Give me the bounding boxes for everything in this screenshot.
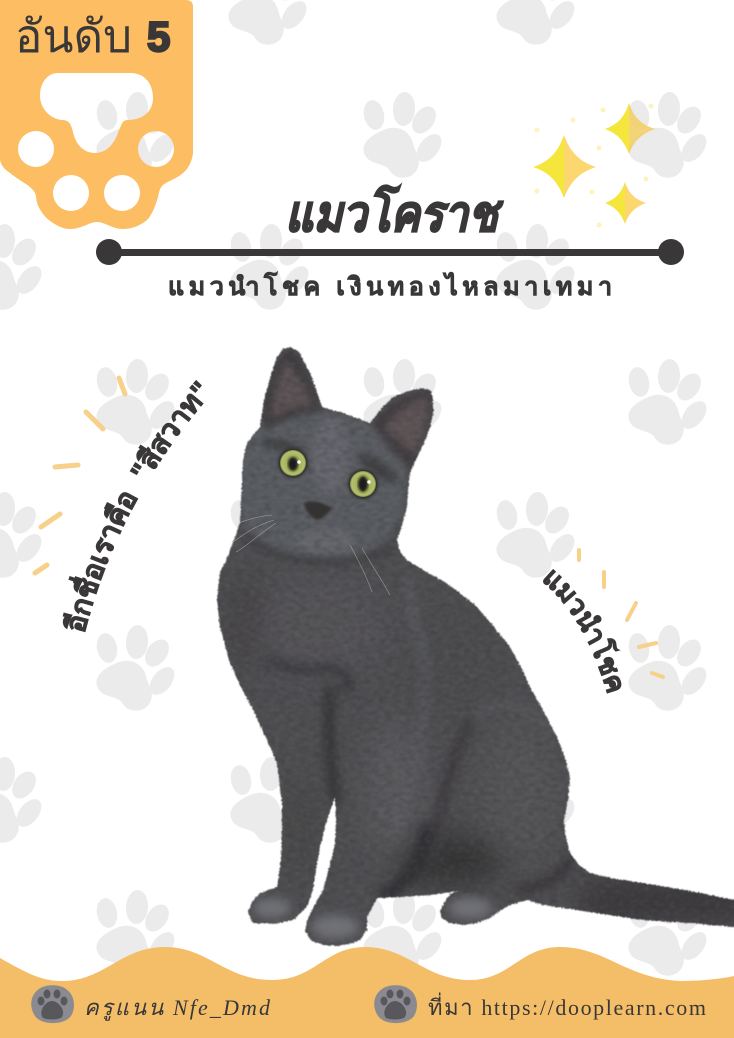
rank badge: paw shaped tag [0, 0, 193, 229]
right callout: lucky cat: แมวนำโชค [543, 568, 622, 694]
left callout: other name: อีกชื่อเราคือ "สีสวาท" [62, 380, 204, 632]
sparkles icon [533, 103, 655, 228]
footer credit: ครูแนน Nfe_Dmd [84, 995, 271, 1021]
footer icon: paw right [374, 985, 417, 1023]
right callout: lucky cat [543, 548, 665, 694]
badge label: อันดับ [15, 10, 132, 62]
badge label: 5 [147, 13, 170, 60]
cat eyes [278, 448, 378, 499]
title: แมวโคราช [285, 184, 504, 242]
subtitle: แมวนำโชค เงินทองไหลมาเทมา [168, 271, 612, 301]
head [239, 349, 433, 562]
grey Korat cat photo illustration [210, 340, 734, 950]
title rule with end dots [96, 239, 684, 265]
fur folds and creases [270, 580, 570, 895]
footer source: ที่มา https://dooplearn.com [428, 992, 706, 1020]
footer wave band [0, 947, 734, 1038]
footer icon: paw left [31, 985, 74, 1023]
cat nose and whiskers [232, 501, 390, 595]
paw highlights [253, 897, 492, 939]
